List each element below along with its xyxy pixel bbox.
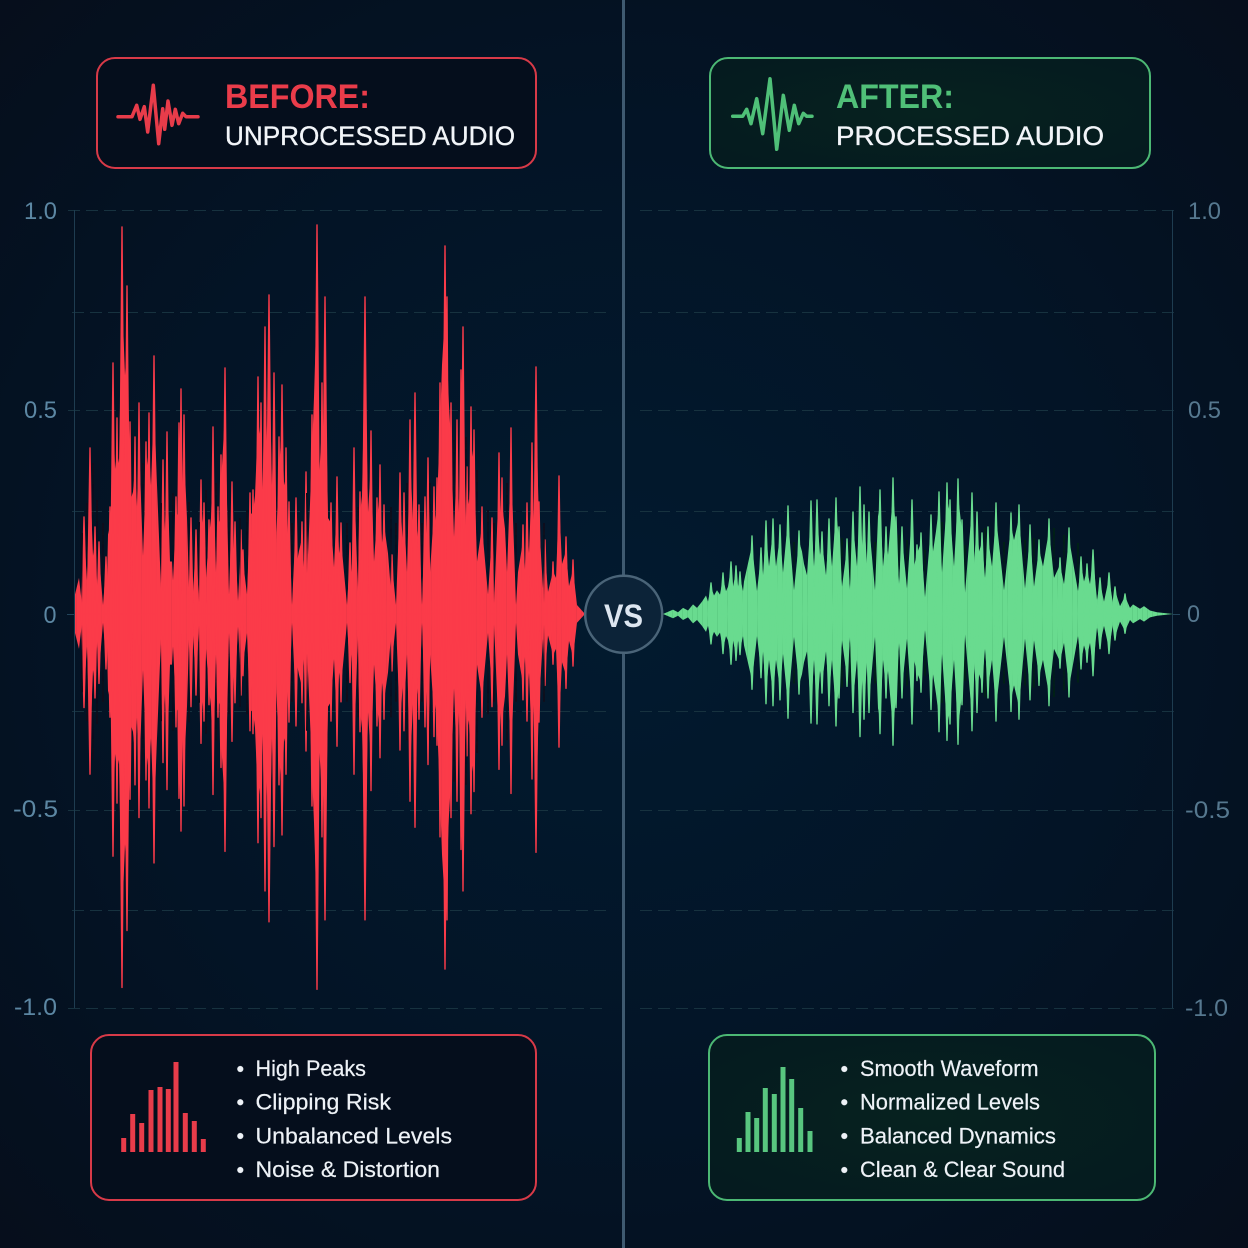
- bullet list: after: Clean & Clear Sound: [860, 1157, 1065, 1182]
- left axis labels: 1.0: [24, 198, 57, 225]
- panel: after header: [710, 58, 1150, 168]
- left axis labels: -0.5: [13, 796, 58, 823]
- heading: before: BEFORE:: [225, 78, 370, 116]
- right axis labels: [1185, 198, 1230, 1022]
- panel: before header: [97, 58, 536, 168]
- VS badge: VS: [604, 598, 643, 634]
- right axis labels: -0.5: [1185, 797, 1230, 824]
- right axis labels: 0.5: [1188, 397, 1221, 424]
- bullet list: after: Normalized Levels: [860, 1090, 1040, 1114]
- bullet list: before: [237, 1056, 452, 1182]
- center divider line: [622, 0, 625, 1248]
- panel: before characteristics: [91, 1035, 536, 1200]
- bullet list: after: Balanced Dynamics: [860, 1124, 1056, 1148]
- subheading: processed audio: PROCESSED AUDIO: [836, 121, 1104, 151]
- right axis labels: 0: [1187, 601, 1200, 628]
- left axis labels: -1.0: [14, 994, 57, 1021]
- icon: green bar chart: [737, 1067, 812, 1152]
- heading: after: AFTER:: [836, 78, 954, 116]
- subheading: unprocessed audio: UNPROCESSED AUDIO: [225, 121, 515, 151]
- left axis labels: 0: [44, 602, 56, 629]
- right axis labels: 1.0: [1188, 198, 1221, 225]
- panel: after characteristics: [709, 1035, 1155, 1200]
- VS badge: [585, 576, 662, 653]
- icon: green waveform: [733, 79, 812, 149]
- right chart axes and grid: [640, 210, 1180, 1008]
- bullet list: before: High Peaks: [256, 1056, 366, 1081]
- left chart axes and grid: [67, 210, 606, 1008]
- bullet list: before: Noise & Distortion: [256, 1157, 440, 1182]
- icon: red waveform: [118, 85, 198, 144]
- bullet list: after: [841, 1056, 1065, 1182]
- icon: red bar chart: [121, 1062, 206, 1152]
- bullet list: after: Smooth Waveform: [860, 1056, 1038, 1081]
- bullet list: before: Unbalanced Levels: [256, 1124, 452, 1148]
- before waveform (red): [75, 225, 585, 989]
- left axis labels: [13, 198, 58, 1021]
- after waveform (green): [663, 478, 1173, 745]
- bullet list: before: Clipping Risk: [256, 1090, 392, 1114]
- right axis labels: -1.0: [1185, 995, 1228, 1022]
- left axis labels: 0.5: [24, 397, 57, 424]
